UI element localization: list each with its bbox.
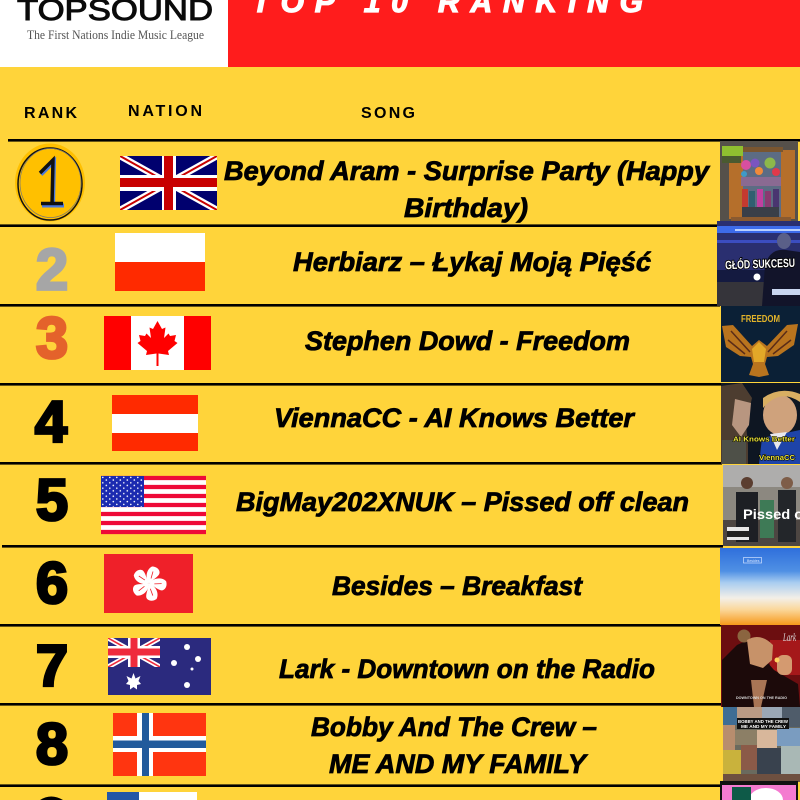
album cover 7 [721, 625, 800, 707]
rank 6: 6 [36, 551, 68, 616]
song 2: Herbiarz – Łykaj Moją Pięść [293, 247, 651, 277]
cover 3 title: FREEDOM [741, 314, 780, 325]
flag: Canada [104, 316, 211, 370]
album cover 9 [720, 781, 798, 800]
rank 2: 2 [36, 238, 68, 302]
rank 7: 7 [36, 634, 68, 698]
album cover 2 [717, 221, 800, 306]
flag: United States [101, 476, 206, 534]
logo tagline: The First Nations Indie Music League [27, 28, 204, 42]
song 7: Lark - Downtown on the Radio [279, 654, 655, 684]
song 3: Stephen Dowd - Freedom [305, 326, 630, 356]
rank 1 medal [15, 144, 85, 222]
song 1: Birthday) [404, 193, 528, 223]
album cover 5 [723, 465, 800, 546]
song 8: Bobby And The Crew – [311, 712, 597, 742]
album cover 8 [723, 707, 800, 782]
cover 7 text: DOWNTOWN ON THE RADIO [736, 696, 787, 700]
rank 8: 8 [36, 712, 68, 777]
rank 3: 3 [36, 306, 68, 371]
header panel: logo [0, 0, 228, 67]
column headings [24, 103, 415, 122]
album cover 3 [721, 306, 800, 382]
song 5: BigMay202XNUK – Pissed off clean [236, 487, 689, 517]
flag: Austria [112, 395, 198, 451]
song 1: Beyond Aram - Surprise Party (Happy [224, 156, 711, 186]
song 1 [224, 156, 711, 223]
flag: Australia [108, 638, 211, 695]
flag: United Kingdom [120, 156, 217, 210]
song 4: ViennaCC - AI Knows Better [274, 403, 635, 433]
rank 9 top sliver [40, 796, 63, 800]
album cover 6 [720, 548, 800, 625]
album cover 4 [721, 383, 800, 464]
heading: song: SONG [361, 105, 415, 122]
song 8 [311, 712, 597, 779]
flag: Poland [115, 233, 205, 291]
cover 8 text [738, 720, 788, 728]
album cover 1 [720, 141, 798, 222]
song 8: ME AND MY FAMILY [329, 749, 589, 779]
heading: nation: NATION [128, 103, 202, 120]
rank 4: 4 [35, 390, 67, 454]
header panel: title [228, 0, 800, 67]
flag: Norway [113, 713, 206, 776]
rank 5: 5 [36, 468, 68, 533]
cover 8 text: ME AND MY FAMILY [741, 724, 786, 729]
cover 6 text: Besides [747, 559, 760, 563]
heading: rank: RANK [24, 105, 77, 122]
cover 4 text: AI Knows Better [733, 436, 795, 444]
cover 4 artist: ViennaCC [759, 455, 795, 462]
flag: ninth nation [107, 792, 197, 800]
cover 8 text: BOBBY AND THE CREW [738, 719, 789, 724]
flag: Hong Kong [104, 554, 193, 613]
rank number 1 [40, 160, 63, 204]
song 6: Besides – Breakfast [332, 571, 583, 601]
